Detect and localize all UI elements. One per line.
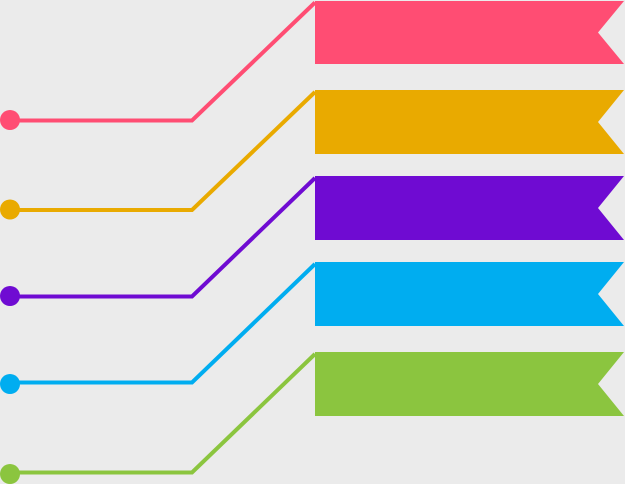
- row 2: amber: [0, 90, 624, 220]
- banner: amber: [315, 90, 624, 154]
- row 5: green: [0, 352, 624, 484]
- dot: green: [0, 464, 20, 484]
- row 4: blue: [0, 262, 624, 394]
- connector: green: [10, 354, 315, 472]
- dot: purple: [0, 286, 20, 306]
- banner: green: [315, 352, 624, 416]
- row 3: purple: [0, 176, 624, 306]
- connector: amber: [10, 92, 315, 210]
- dot: blue: [0, 374, 20, 394]
- connector: blue: [10, 264, 315, 382]
- connector: pink: [10, 2, 315, 120]
- banner: purple: [315, 176, 624, 240]
- dot: amber: [0, 200, 20, 220]
- row 1: pink: [0, 1, 624, 130]
- connector: purple: [10, 178, 315, 296]
- banner: pink: [315, 1, 624, 64]
- banner: blue: [315, 262, 624, 326]
- dot: pink: [0, 110, 20, 130]
